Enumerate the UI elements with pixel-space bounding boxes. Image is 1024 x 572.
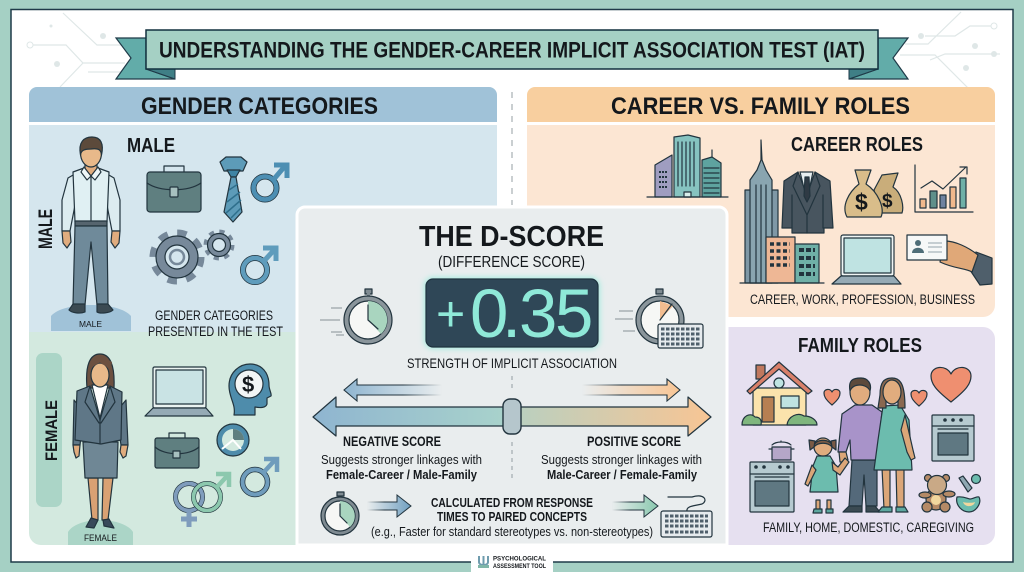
arrow: to keyboard bbox=[612, 495, 658, 517]
strength caption: STRENGTH OF IMPLICIT ASSOCIATION bbox=[407, 355, 617, 371]
caption: gender categories bbox=[148, 308, 283, 339]
panel: family roles bbox=[728, 327, 995, 545]
title banner bbox=[116, 30, 908, 79]
icon: head with dollar sign: $ bbox=[242, 372, 254, 397]
family roles heading: FAMILY ROLES bbox=[798, 335, 922, 357]
icon: necktie bbox=[220, 157, 247, 222]
caption: career terms: CAREER, WORK, PROFESSION, BUSINESS bbox=[750, 292, 975, 307]
icon: small heart bbox=[911, 390, 927, 406]
positive score text: POSITIVE SCORE bbox=[587, 433, 681, 449]
icon: briefcase bbox=[147, 166, 201, 212]
icon: growth chart bbox=[915, 165, 973, 212]
score display: 5 bbox=[555, 275, 593, 352]
score display bbox=[424, 275, 600, 352]
panel: female bbox=[29, 332, 300, 545]
logo: psychological assessment tool: PSYCHOLOGICAL bbox=[493, 556, 546, 562]
positive score text bbox=[541, 433, 702, 482]
positive score text: Male-Career / Female-Family bbox=[547, 467, 698, 482]
d-score subheading: (DIFFERENCE SCORE) bbox=[438, 254, 585, 271]
logo: psychological assessment tool: ASSESSMENT TOOL bbox=[493, 563, 546, 570]
icon: money bags: $ bbox=[882, 191, 893, 212]
negative score text bbox=[321, 433, 482, 482]
panel: career roles bbox=[527, 125, 995, 317]
icon: briefcase bbox=[155, 433, 199, 468]
career roles heading: CAREER ROLES bbox=[791, 134, 923, 156]
male figure bbox=[51, 137, 131, 331]
icon: business suit bbox=[782, 172, 833, 233]
female figure: FEMALE bbox=[84, 533, 117, 543]
icon: stopwatch bbox=[320, 289, 392, 344]
calculation text: CALCULATED FROM RESPONSE bbox=[431, 495, 593, 510]
icon: interlocked gender symbols bbox=[176, 474, 229, 527]
icon: city buildings bbox=[647, 135, 728, 197]
calculation text bbox=[371, 495, 653, 539]
female figure bbox=[68, 354, 133, 545]
male figure: MALE bbox=[79, 320, 102, 329]
score display: 3 bbox=[519, 275, 557, 352]
icon: house bbox=[742, 362, 817, 425]
icon: large gear bbox=[153, 233, 201, 281]
icon: stove with pot bbox=[750, 441, 794, 512]
icon: teddy bear bbox=[919, 474, 955, 512]
negative score text: Female-Career / Male-Family bbox=[326, 467, 478, 482]
panel: gender categories header: GENDER CATEGORIES bbox=[141, 93, 378, 120]
female side label bbox=[36, 353, 62, 507]
icon: money bags: $ bbox=[855, 189, 868, 215]
icon: stopwatch with keyboard bbox=[615, 289, 703, 348]
score display: 0 bbox=[470, 275, 508, 352]
icon: small heart bbox=[824, 389, 840, 405]
score display: . bbox=[502, 275, 521, 352]
score display: + bbox=[436, 286, 465, 342]
icon: oven bbox=[932, 415, 974, 461]
icon: hand holding business card bbox=[907, 235, 992, 285]
logo: psychological assessment tool bbox=[471, 553, 553, 572]
icon: skyscraper and office blocks bbox=[740, 140, 824, 283]
arrow: to calculation bbox=[367, 495, 411, 517]
icon: money bags bbox=[845, 170, 903, 217]
male side label: MALE bbox=[36, 209, 57, 249]
icon: round clock chart bbox=[217, 424, 249, 456]
icon: male symbol bbox=[242, 459, 277, 494]
panel: male bbox=[29, 125, 497, 335]
negative score text: NEGATIVE SCORE bbox=[343, 433, 441, 449]
caption: family terms: FAMILY, HOME, DOMESTIC, CAREGIVING bbox=[763, 520, 974, 535]
d-score heading: THE D-SCORE bbox=[419, 221, 604, 253]
panel: the d-score bbox=[297, 207, 727, 545]
icon: stopwatch bbox=[321, 492, 359, 535]
female side label: FEMALE bbox=[42, 400, 61, 461]
calculation text: TIMES TO PAIRED CONCEPTS bbox=[437, 509, 587, 524]
icon: laptop bbox=[145, 367, 213, 416]
icon: large heart bbox=[931, 367, 971, 402]
calculation text: (e.g., Faster for standard stereotypes vs. non-stereotypes) bbox=[371, 524, 653, 539]
caption: gender categories: GENDER CATEGORIES bbox=[155, 308, 273, 323]
icon: baby toys bbox=[957, 474, 980, 512]
negative score text: Suggests stronger linkages with bbox=[321, 452, 482, 467]
icon: laptop bbox=[832, 235, 901, 284]
panel: career vs family header: CAREER VS. FAMILY ROLES bbox=[611, 93, 910, 120]
icon: keyboard bbox=[661, 496, 712, 537]
title banner: UNDERSTANDING THE GENDER-CAREER IMPLICIT ASSOCIATION TEST (IAT) bbox=[159, 38, 865, 62]
icon: male symbol bbox=[254, 165, 287, 200]
icon: male symbol bbox=[243, 248, 276, 282]
arrow: negative direction small bbox=[344, 379, 442, 401]
arrow: positive direction small bbox=[582, 379, 680, 401]
male heading: MALE bbox=[127, 135, 175, 157]
caption: gender categories: PRESENTED IN THE TEST bbox=[148, 324, 283, 339]
panel: career vs family header bbox=[527, 87, 995, 122]
panel: gender categories header bbox=[29, 87, 497, 122]
icon: small gear bbox=[206, 232, 232, 258]
family figures bbox=[805, 378, 915, 513]
positive score text: Suggests stronger linkages with bbox=[541, 452, 702, 467]
icon: head with dollar sign bbox=[229, 364, 271, 415]
score scale arrow bbox=[313, 397, 711, 436]
